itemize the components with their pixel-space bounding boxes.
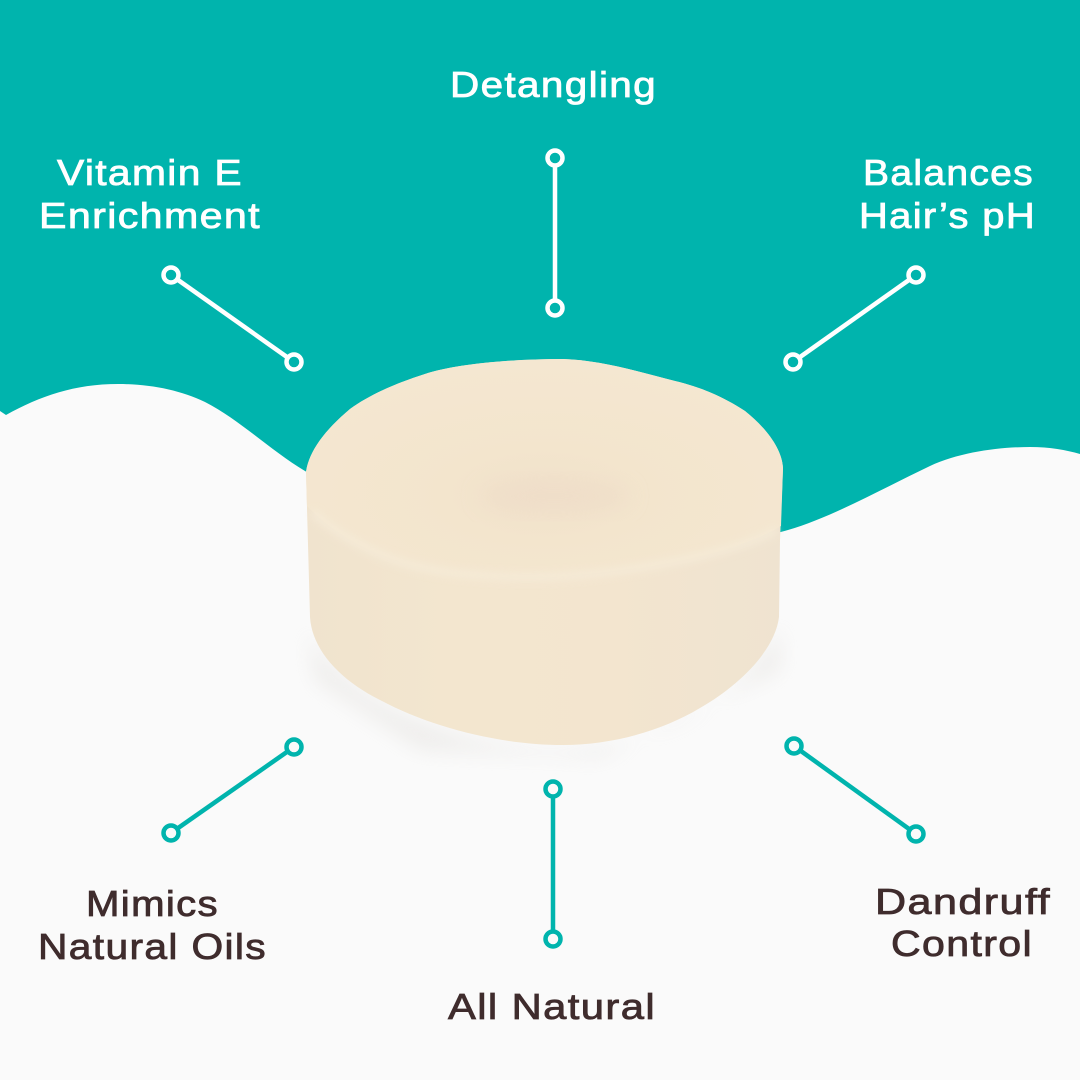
label: Dandruff Control: Dandruff bbox=[875, 881, 1051, 922]
bar shadow bbox=[308, 625, 780, 758]
label: Vitamin E Enrichment: Vitamin E bbox=[57, 152, 243, 193]
connector: All Natural bbox=[546, 782, 560, 946]
label: Balances Hair's pH: Hair’s pH bbox=[859, 195, 1036, 236]
bar top face bbox=[306, 359, 783, 577]
connector: Detangling bbox=[548, 150, 562, 316]
label: Vitamin E Enrichment: Enrichment bbox=[39, 195, 261, 236]
connector: Mimics Natural Oils bbox=[164, 740, 302, 840]
label: Mimics Natural Oils bbox=[38, 883, 267, 967]
product: shampoo bar bbox=[306, 359, 783, 758]
connector: Vitamin E bbox=[164, 268, 302, 370]
label: Mimics Natural Oils: Mimics bbox=[86, 883, 219, 924]
bar dimple bbox=[480, 478, 630, 514]
label: Dandruff Control: Control bbox=[891, 923, 1033, 964]
connector: Balances pH bbox=[786, 268, 924, 370]
label: Balances Hair's pH: Balances bbox=[863, 152, 1034, 193]
bar body bbox=[306, 359, 783, 745]
label: Mimics Natural Oils: Natural Oils bbox=[38, 926, 267, 967]
label: Vitamin E Enrichment bbox=[39, 152, 261, 236]
label: Balances Hair's pH bbox=[859, 152, 1036, 236]
teal wave panel bbox=[0, 0, 1080, 535]
bar rim highlight bbox=[312, 512, 777, 577]
connector: Dandruff Control bbox=[786, 738, 924, 842]
label: All Natural: All Natural bbox=[448, 986, 656, 1027]
label: Dandruff Control bbox=[875, 881, 1051, 964]
label: Detangling: Detangling bbox=[450, 64, 657, 105]
